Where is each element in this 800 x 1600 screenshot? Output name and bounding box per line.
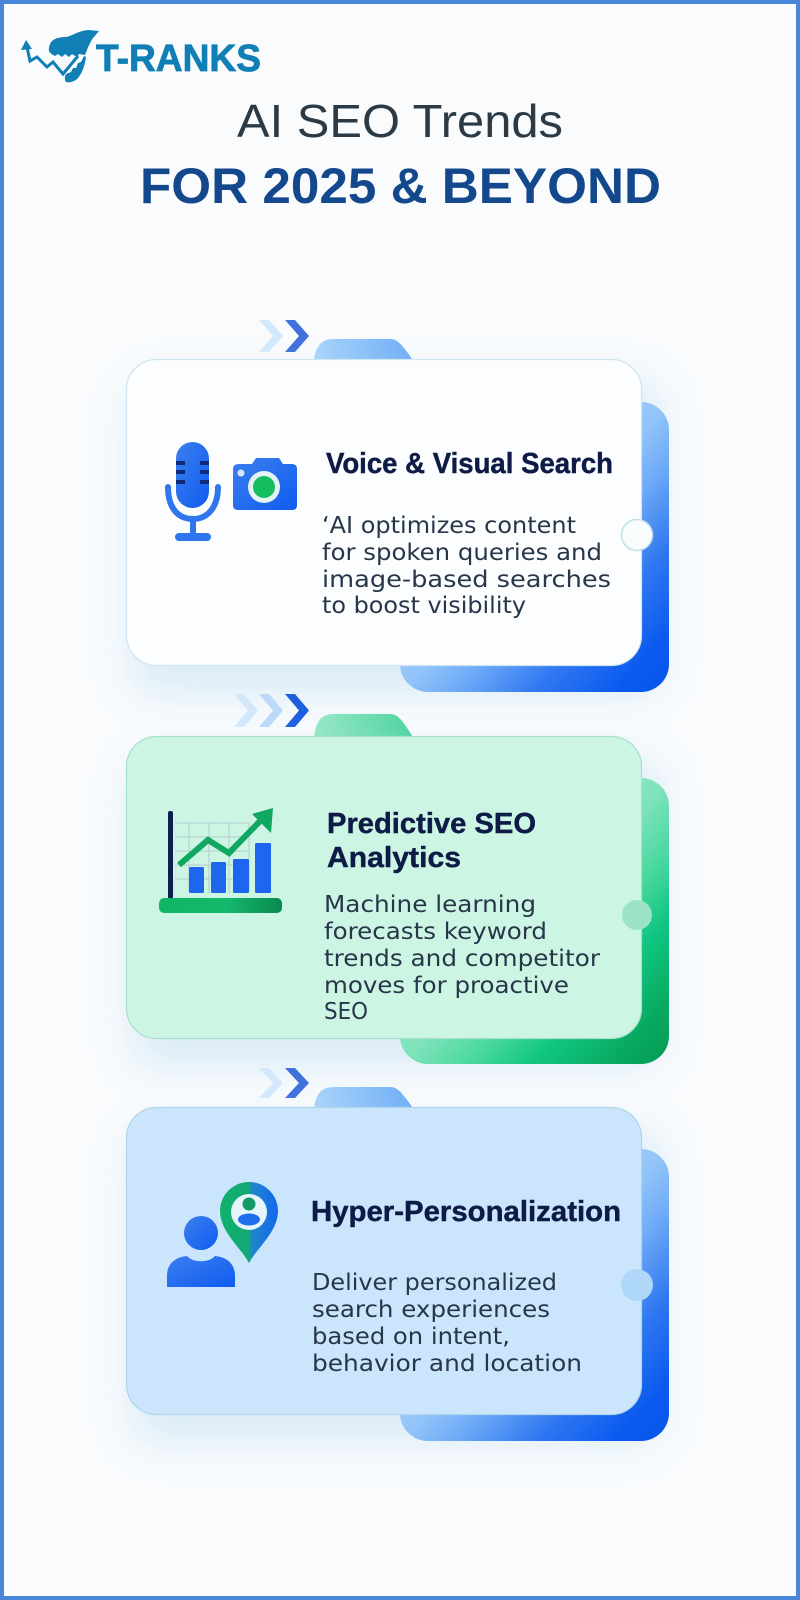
body text: trends and competitor bbox=[324, 946, 601, 972]
back plate bbox=[400, 402, 669, 692]
tab bbox=[314, 339, 413, 360]
icon: microphone bbox=[168, 442, 218, 541]
icon: location pin bbox=[220, 1182, 278, 1263]
panel: predictive seo analytics bbox=[126, 714, 669, 1067]
connector circle bbox=[622, 520, 652, 550]
card bbox=[126, 1108, 642, 1414]
heading: Voice & Visual Search bbox=[326, 448, 613, 480]
body text: Deliver personalized bbox=[312, 1270, 557, 1296]
back plate bbox=[400, 778, 669, 1064]
body text: moves for proactive bbox=[324, 973, 569, 999]
icon: person bbox=[167, 1216, 235, 1287]
body text: to boost visibility bbox=[322, 593, 526, 619]
body text bbox=[322, 513, 611, 619]
body text bbox=[312, 1270, 582, 1377]
title line 1: AI SEO Trends bbox=[237, 95, 563, 147]
chevrons above card 2 bbox=[234, 694, 309, 727]
title bbox=[140, 95, 661, 214]
body text: based on intent, bbox=[312, 1324, 510, 1350]
panel: hyper-personalization bbox=[126, 1087, 669, 1443]
body text: forecasts keyword bbox=[324, 919, 547, 945]
title line 2: FOR 2025 & BEYOND bbox=[140, 158, 661, 214]
icon: dinosaur head bbox=[49, 30, 99, 82]
card bbox=[126, 360, 642, 666]
logo: T-RANKS bbox=[21, 30, 261, 82]
panel: voice and visual search bbox=[126, 339, 669, 695]
chevrons above card 1 bbox=[259, 320, 309, 352]
logo wordmark: T-RANKS bbox=[96, 38, 261, 80]
heading: Hyper-Personalization bbox=[311, 1196, 621, 1228]
body text: behavior and location bbox=[312, 1351, 582, 1377]
back plate bbox=[400, 1149, 669, 1441]
connector circle bbox=[621, 1269, 653, 1301]
body text: search experiences bbox=[312, 1297, 550, 1323]
body text: for spoken queries and bbox=[322, 540, 602, 566]
card shadow bbox=[130, 757, 660, 1067]
card shadow bbox=[130, 380, 660, 695]
heading bbox=[327, 808, 536, 874]
icon: growth chart bbox=[159, 808, 282, 913]
tab bbox=[314, 714, 413, 737]
body text: Machine learning bbox=[324, 892, 536, 918]
body text: ‘AI optimizes content bbox=[322, 513, 576, 539]
chevrons above card 3 bbox=[259, 1068, 309, 1098]
icon: camera bbox=[233, 458, 297, 510]
body text: SEO bbox=[324, 999, 368, 1025]
heading: Analytics bbox=[327, 842, 461, 874]
body text bbox=[324, 892, 601, 1025]
icon: growth arrow zigzag bbox=[21, 40, 78, 74]
tab bbox=[314, 1087, 413, 1108]
body text: image-based searches bbox=[322, 567, 611, 593]
heading: Predictive SEO bbox=[327, 808, 536, 840]
card bbox=[126, 736, 642, 1038]
card shadow bbox=[130, 1128, 660, 1443]
connector circle bbox=[622, 900, 652, 930]
